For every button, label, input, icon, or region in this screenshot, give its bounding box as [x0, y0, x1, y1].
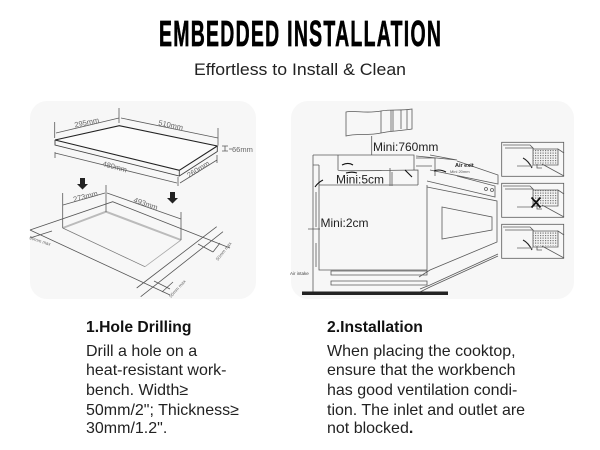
vent detail: crossed	[502, 183, 564, 217]
text block: hole drilling	[86, 319, 239, 437]
cooktop dimensions: 295mm	[74, 115, 100, 129]
text block: hole drilling: bench. Width≥	[86, 382, 188, 399]
label: Mini 760mm: Mini:760mm	[373, 140, 438, 154]
label: Mini 5cm: Mini:5cm	[336, 172, 384, 186]
panel: installation diagram	[290, 101, 574, 299]
worktop cut-out: 50mm max	[168, 278, 187, 299]
label: mini 20mm: Mini 20mm	[450, 169, 470, 174]
oven	[416, 155, 498, 292]
cooktop dimensions: 480mm	[101, 159, 128, 174]
vent detail: top	[502, 142, 564, 176]
text block: installation: tion. The inlet and outlet are	[327, 402, 525, 419]
cooktop dimensions: 510mm	[158, 118, 184, 132]
cooktop outline	[55, 126, 217, 176]
worktop cut-out: 273mm	[72, 189, 99, 204]
text block: hole drilling: 1.Hole Drilling	[86, 319, 191, 336]
worktop cut-out: 50mm max	[215, 240, 233, 262]
text block: installation	[327, 319, 525, 437]
text block: hole drilling: 30mm/1.2".	[86, 420, 167, 437]
range hood	[346, 109, 412, 136]
arrow: down right	[167, 192, 178, 204]
subtitle: Effortless to Install & Clean	[194, 61, 406, 79]
text block: installation: has good ventilation condi-	[327, 382, 517, 399]
vent detail: bottom	[502, 224, 564, 258]
worktop cut-out	[29, 185, 233, 299]
text block: installation: not blocked.	[327, 420, 413, 437]
label: Mini 2cm: Mini:2cm	[320, 216, 369, 230]
text block: hole drilling: 50mm/2"; Thickness≥	[86, 402, 239, 419]
text block: installation: 2.Installation	[327, 319, 423, 336]
cooktop dimensions	[55, 108, 253, 186]
cooktop dimensions: 66mm	[232, 145, 253, 154]
worktop cut-out: 50mm max	[29, 235, 52, 247]
label: air exit: Air exit	[455, 163, 474, 169]
label: air intake: Air intake	[290, 271, 309, 276]
title: EMBEDDED INSTALLATION	[159, 15, 441, 55]
text block: hole drilling: Drill a hole on a	[86, 343, 197, 360]
panel: hole drilling diagram	[29, 101, 256, 299]
cooktop dimensions: 260mm	[185, 159, 211, 180]
arrow: down left	[77, 178, 88, 190]
text block: installation: When placing the cooktop,	[327, 343, 516, 360]
floor bar	[302, 292, 448, 295]
text block: installation: ensure that the workbench	[327, 362, 516, 379]
cabinet outline	[308, 136, 427, 292]
worktop cut-out: 493mm	[132, 195, 159, 212]
text block: hole drilling: heat-resistant work-	[86, 362, 226, 379]
